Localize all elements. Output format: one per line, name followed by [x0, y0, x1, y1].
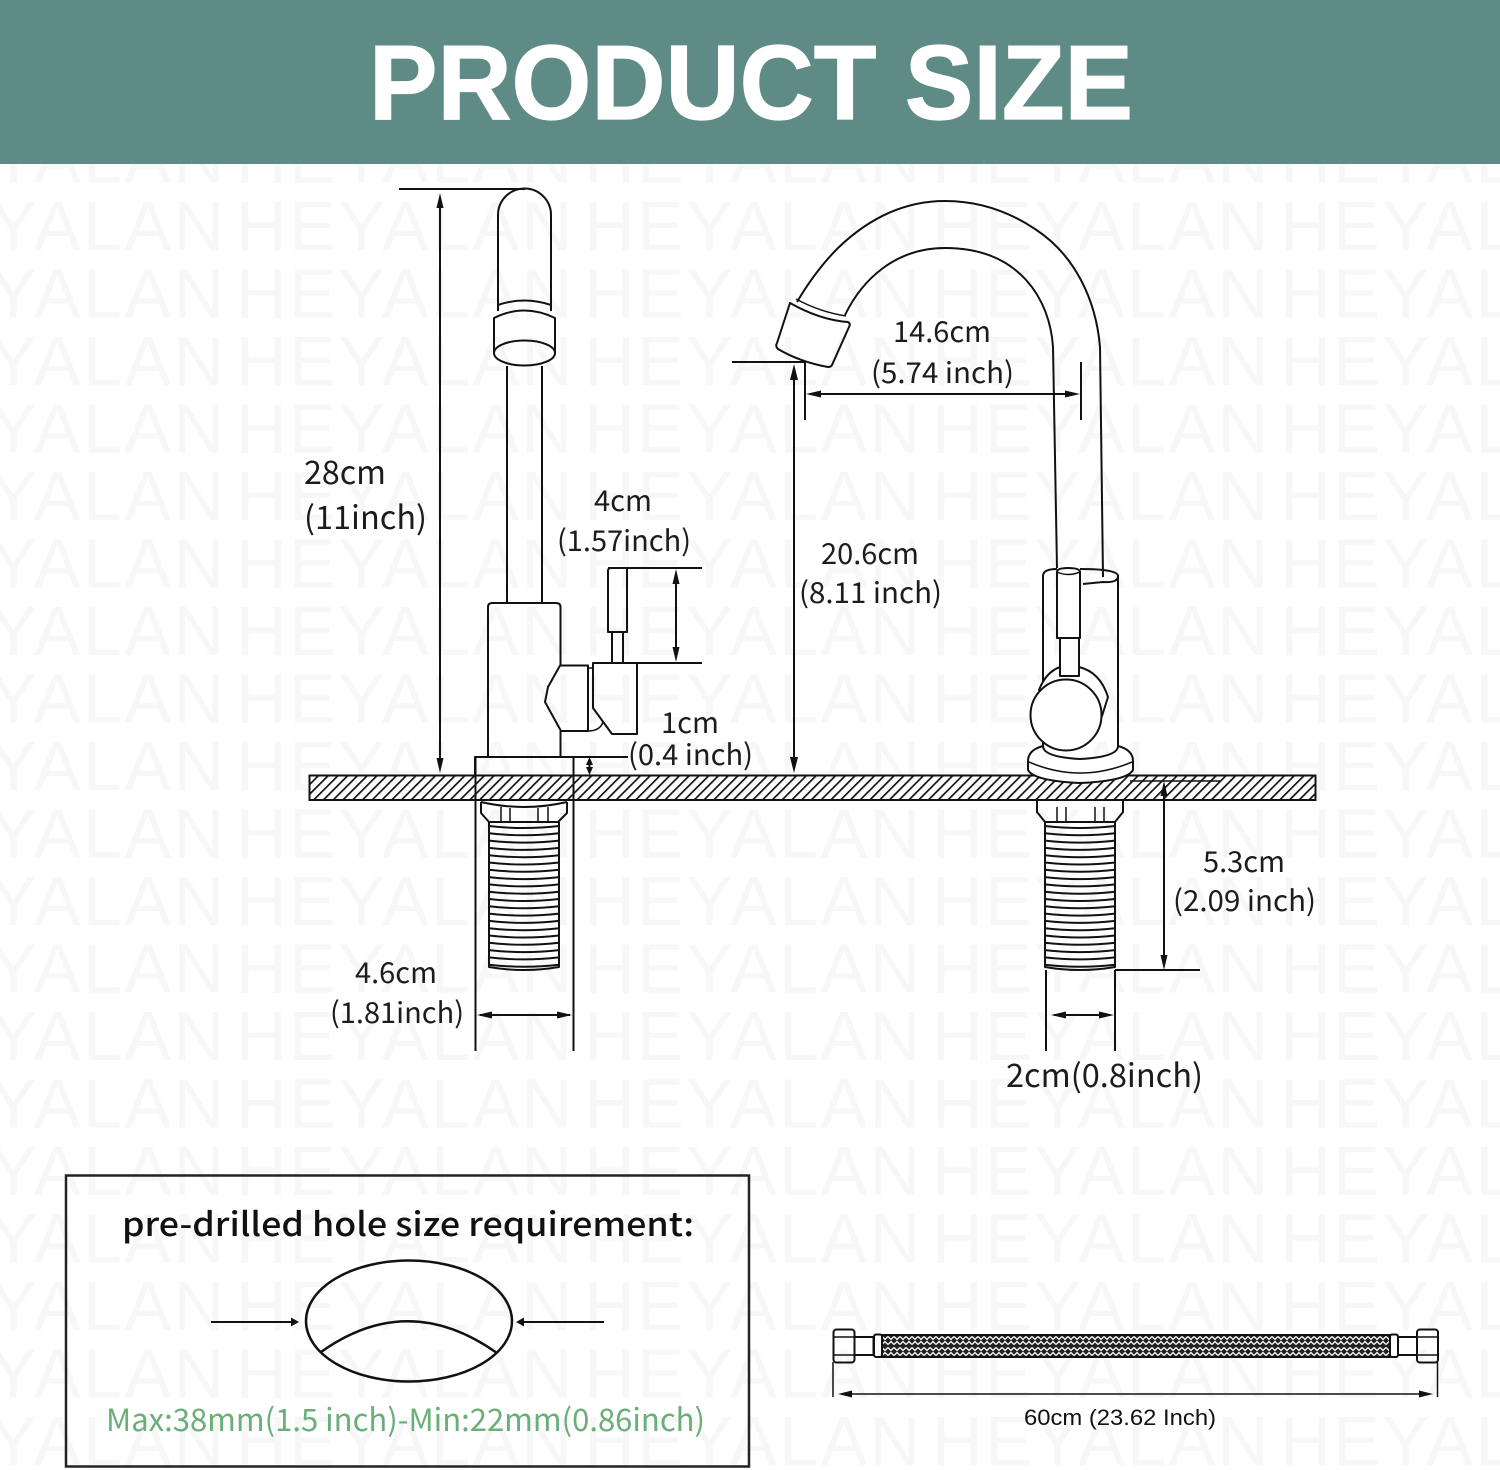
dimension: 5.3cm shank length: (2.09 inch): [1173, 878, 1316, 920]
dimension: 14.6cm reach: (5.74 inch): [871, 350, 1014, 392]
countertop cross-section: [310, 776, 1316, 800]
knob back: [1039, 666, 1108, 716]
title: PRODUCT SIZE: [369, 24, 1133, 142]
threaded shank: [1045, 822, 1115, 970]
dimension: 60cm hose length: [833, 1362, 1438, 1430]
dimension: 28cm total height: 28cm: [304, 448, 386, 494]
dimension: 2cm shank width: 2cm(0.8inch): [1006, 1051, 1203, 1097]
dimension: 60cm hose length: 60cm (23.62 Inch): [1024, 1405, 1216, 1430]
knob: [1030, 680, 1102, 750]
panel: pre-drilled hole size: [66, 1176, 749, 1466]
braid: [882, 1335, 1390, 1357]
dimension: 1cm base: 1cm: [661, 700, 719, 742]
dimension: 5.3cm shank length: 5.3cm: [1203, 839, 1285, 881]
panel heading: pre-drilled hole size requirement:: [122, 1198, 694, 1246]
left fitting: [834, 1330, 854, 1362]
lower nut: [481, 802, 567, 822]
aerator collar: [494, 310, 555, 353]
dimension: 4cm handle: (1.57inch): [557, 518, 691, 560]
lever: [1060, 638, 1079, 676]
dimension: 1cm base: [573, 700, 753, 775]
base plate: [475, 757, 574, 776]
dimension: 20.6cm spout height: (8.11 inch): [799, 570, 942, 612]
stem: [507, 366, 542, 603]
dimension: 1cm base: (0.4 inch): [628, 732, 753, 774]
dimension: 2cm shank width: [1006, 970, 1203, 1097]
dimension: 4cm handle: 4cm: [594, 478, 652, 520]
body: [488, 603, 560, 757]
spout tip: [498, 188, 551, 311]
flange: [1028, 746, 1133, 783]
dimension: 20.6cm spout height: 20.6cm: [821, 531, 919, 573]
hole diagram: [211, 1260, 604, 1382]
dimension: 5.3cm shank length: [1115, 781, 1316, 970]
dimension: 4.6cm base width: [330, 757, 574, 1051]
dimension: 4.6cm base width: 4.6cm: [355, 950, 437, 992]
front view faucet: [776, 201, 1133, 970]
hole size range: Max:38mm(1.5 inch)-Min:22mm(0.86inch): [106, 1395, 705, 1440]
dimension: 14.6cm reach: 14.6cm: [893, 309, 991, 351]
dimension: 4cm handle: [557, 478, 702, 663]
dimension: 14.6cm reach: [805, 309, 1081, 420]
dimension: 20.6cm spout height: [732, 362, 942, 773]
body: [1043, 576, 1118, 752]
dimension: 28cm total height: (11inch): [304, 493, 427, 539]
aerator: [776, 303, 850, 367]
knob: [545, 666, 588, 731]
header banner: [0, 0, 1500, 164]
threaded shank: [489, 822, 559, 970]
lower nut: [1037, 801, 1123, 822]
lever: [593, 663, 637, 734]
right fitting: [1390, 1334, 1398, 1357]
side view faucet: [475, 188, 637, 970]
dimension: 4.6cm base width: (1.81inch): [330, 990, 464, 1032]
dimension: 28cm total height: [304, 189, 525, 773]
curved spout: [797, 201, 1103, 577]
braided hose: [834, 1330, 1438, 1362]
